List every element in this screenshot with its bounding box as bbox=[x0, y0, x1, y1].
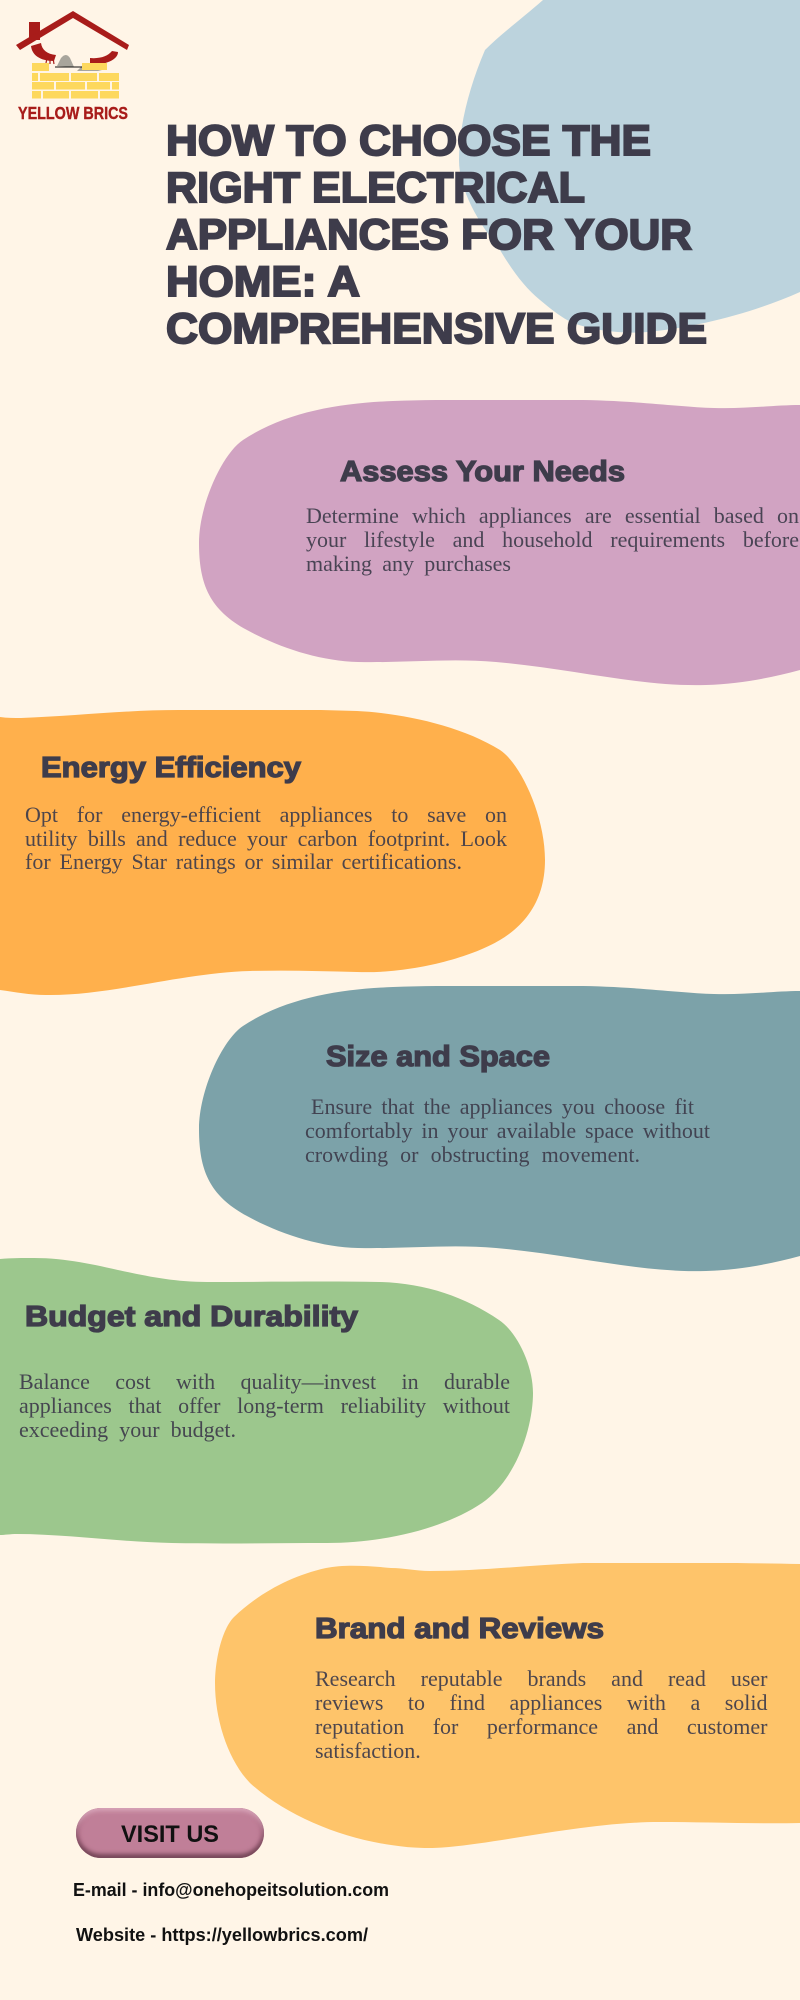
heading: Assess Your Needs bbox=[340, 456, 625, 488]
body text: Balance cost with quality—invest in durable bbox=[19, 1369, 510, 1394]
yellow blob bbox=[215, 1562, 800, 1848]
body text bbox=[315, 1666, 768, 1763]
icon: mortar and trowel bbox=[55, 55, 102, 71]
panel: Brand and Reviews bbox=[215, 1563, 800, 1848]
body text: crowding or obstructing movement. bbox=[305, 1142, 640, 1167]
background blob: light blue bbox=[459, 0, 800, 333]
contact: email: E-mail - info@onehopeitsolution.com bbox=[73, 1880, 389, 1900]
body text: Research reputable brands and read user bbox=[315, 1666, 768, 1691]
teal blob bbox=[199, 986, 800, 1271]
body text bbox=[306, 503, 799, 576]
body text: satisfaction. bbox=[315, 1738, 421, 1763]
body text: Determine which appliances are essential based on bbox=[306, 503, 799, 528]
title: APPLIANCES FOR YOUR bbox=[166, 211, 692, 259]
body text: utility bills and reduce your carbon footprint. Look bbox=[25, 826, 507, 850]
body text bbox=[305, 1094, 710, 1167]
contact: website: Website - https://yellowbrics.com/ bbox=[76, 1925, 368, 1945]
title: HOME: A bbox=[166, 258, 360, 306]
body text bbox=[19, 1369, 510, 1442]
body text bbox=[25, 802, 507, 874]
orange blob bbox=[0, 709, 545, 995]
panel: Budget and Durability bbox=[0, 1258, 533, 1544]
title: RIGHT ELECTRICAL bbox=[166, 164, 585, 212]
body text: Ensure that the appliances you choose fit bbox=[311, 1094, 694, 1119]
body text: making any purchases bbox=[306, 551, 511, 576]
title bbox=[166, 117, 707, 353]
panel: Assess Your Needs bbox=[199, 400, 800, 686]
heading: Budget and Durability bbox=[25, 1301, 358, 1333]
icon: bricklayer arms bbox=[31, 43, 118, 68]
heading: Size and Space bbox=[326, 1041, 550, 1073]
icon: brick wall bbox=[32, 63, 119, 98]
button: Visit Us: VISIT US bbox=[121, 1821, 219, 1848]
title: HOW TO CHOOSE THE bbox=[166, 117, 651, 165]
body text: reputation for performance and customer bbox=[315, 1714, 768, 1739]
body text: appliances that offer long-term reliability without bbox=[19, 1393, 510, 1418]
panel: Energy Efficiency bbox=[0, 710, 545, 995]
heading: Energy Efficiency bbox=[41, 752, 301, 784]
title: COMPREHENSIVE GUIDE bbox=[166, 305, 707, 353]
logo: Yellow Brics bbox=[16, 11, 129, 123]
body text: comfortably in your available space without bbox=[305, 1118, 710, 1143]
body text: for Energy Star ratings or similar certifications. bbox=[25, 849, 462, 874]
heading: Brand and Reviews bbox=[315, 1613, 604, 1645]
button: Visit Us bbox=[76, 1808, 264, 1858]
body text: your lifestyle and household requirements before bbox=[306, 527, 799, 552]
green blob bbox=[0, 1258, 533, 1543]
body text: reviews to find appliances with a solid bbox=[315, 1690, 768, 1715]
body text: Opt for energy-efficient appliances to save on bbox=[25, 802, 507, 827]
pink blob bbox=[199, 400, 800, 685]
body text: exceeding your budget. bbox=[19, 1417, 236, 1442]
icon: house roof bbox=[16, 11, 129, 50]
panel: Size and Space bbox=[199, 986, 800, 1272]
